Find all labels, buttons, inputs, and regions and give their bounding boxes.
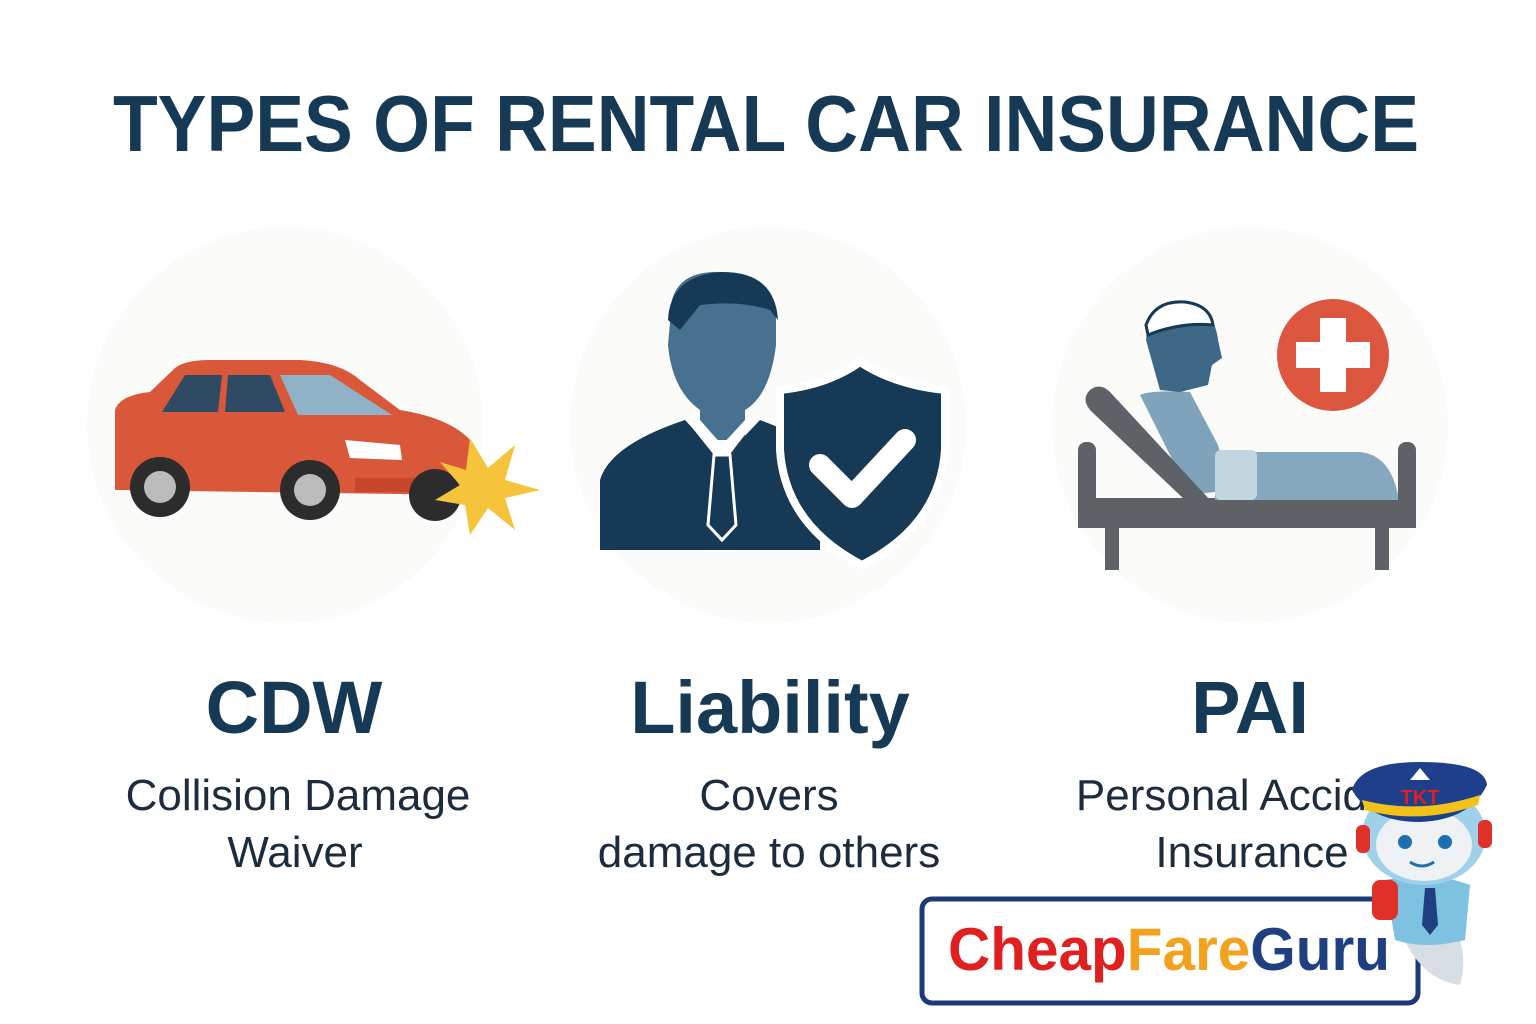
icon: person with shield bbox=[600, 272, 945, 565]
heading: CDW: CDW bbox=[206, 666, 383, 749]
icon: mascot bbox=[1352, 762, 1492, 985]
panel: PAI bbox=[1052, 227, 1448, 877]
logo: CheapFareGuru bbox=[922, 899, 1418, 1003]
panel: CDW: Waiver bbox=[227, 828, 363, 877]
heading: PAI: PAI bbox=[1191, 666, 1309, 749]
panel: Liability: damage to others bbox=[598, 828, 940, 877]
icon circle background PAI bbox=[1052, 227, 1448, 623]
panel: PAI: Insurance bbox=[1155, 828, 1349, 877]
icon: mascot: TKT bbox=[1401, 787, 1439, 809]
icon: red car crash bbox=[115, 360, 540, 535]
title: TYPES OF RENTAL CAR INSURANCE bbox=[113, 79, 1419, 168]
logo: CheapFareGuru: CheapFareGuru bbox=[948, 916, 1390, 983]
text: CDW description: Collision Damage bbox=[126, 771, 470, 820]
heading: Liability: Liability bbox=[630, 666, 910, 749]
text: Liability description: Covers bbox=[699, 771, 839, 820]
text: PAI description: Personal Accident bbox=[1076, 771, 1428, 820]
icon: patient in hospital bed bbox=[1078, 299, 1416, 570]
icon circle background Liability bbox=[570, 227, 966, 623]
icon circle background CDW bbox=[87, 227, 483, 623]
panel: Liability bbox=[570, 227, 966, 877]
panel: CDW bbox=[87, 227, 540, 877]
